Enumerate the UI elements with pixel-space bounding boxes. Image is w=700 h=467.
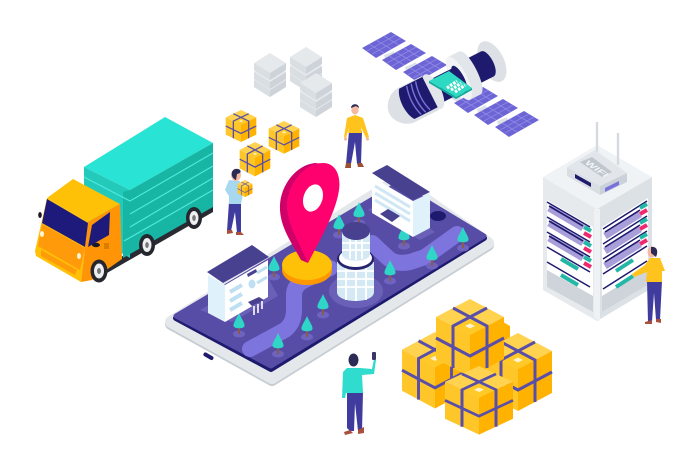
left building bbox=[207, 245, 269, 322]
phone screen bbox=[176, 186, 484, 369]
pin shape bbox=[280, 163, 325, 263]
teal control panel bbox=[429, 71, 472, 99]
wifi router bbox=[567, 150, 627, 195]
small parcels bbox=[226, 110, 299, 176]
torso bbox=[344, 115, 369, 138]
plinths bbox=[200, 272, 278, 322]
technician at server bbox=[632, 246, 665, 324]
person carrying parcel bbox=[225, 169, 252, 235]
pin hole bbox=[300, 182, 326, 214]
left rack bbox=[547, 200, 593, 312]
truck chassis bbox=[105, 205, 213, 273]
server stacks bbox=[254, 47, 332, 117]
cargo box bbox=[84, 117, 213, 258]
legs bbox=[346, 131, 362, 164]
phone with map bbox=[171, 163, 488, 380]
road bbox=[250, 234, 457, 349]
delivery truck bbox=[35, 117, 213, 282]
cylindrical tower bbox=[337, 222, 374, 301]
person holding up phone bbox=[342, 352, 376, 435]
truck wheels bbox=[139, 207, 202, 256]
solar panel connectors bbox=[385, 54, 508, 124]
phone speaker bbox=[203, 352, 214, 361]
right rack bbox=[602, 198, 648, 312]
front wheel bbox=[90, 260, 108, 282]
truck cab bbox=[35, 179, 122, 282]
stacked parcels bbox=[402, 299, 552, 435]
solar panels bbox=[362, 32, 539, 137]
antennas bbox=[597, 122, 618, 165]
phone body bbox=[171, 182, 488, 380]
person with yellow sweater standing bbox=[344, 104, 369, 168]
pin base bbox=[282, 255, 332, 285]
head bbox=[351, 106, 359, 114]
location pin bbox=[280, 163, 339, 285]
right building bbox=[372, 165, 430, 237]
wifi server tower bbox=[543, 122, 652, 321]
wifi label: WIFI bbox=[582, 160, 610, 179]
satellite body bbox=[379, 35, 513, 135]
satellite bbox=[362, 32, 539, 137]
trees bbox=[233, 202, 469, 358]
phone camera bbox=[430, 211, 446, 221]
